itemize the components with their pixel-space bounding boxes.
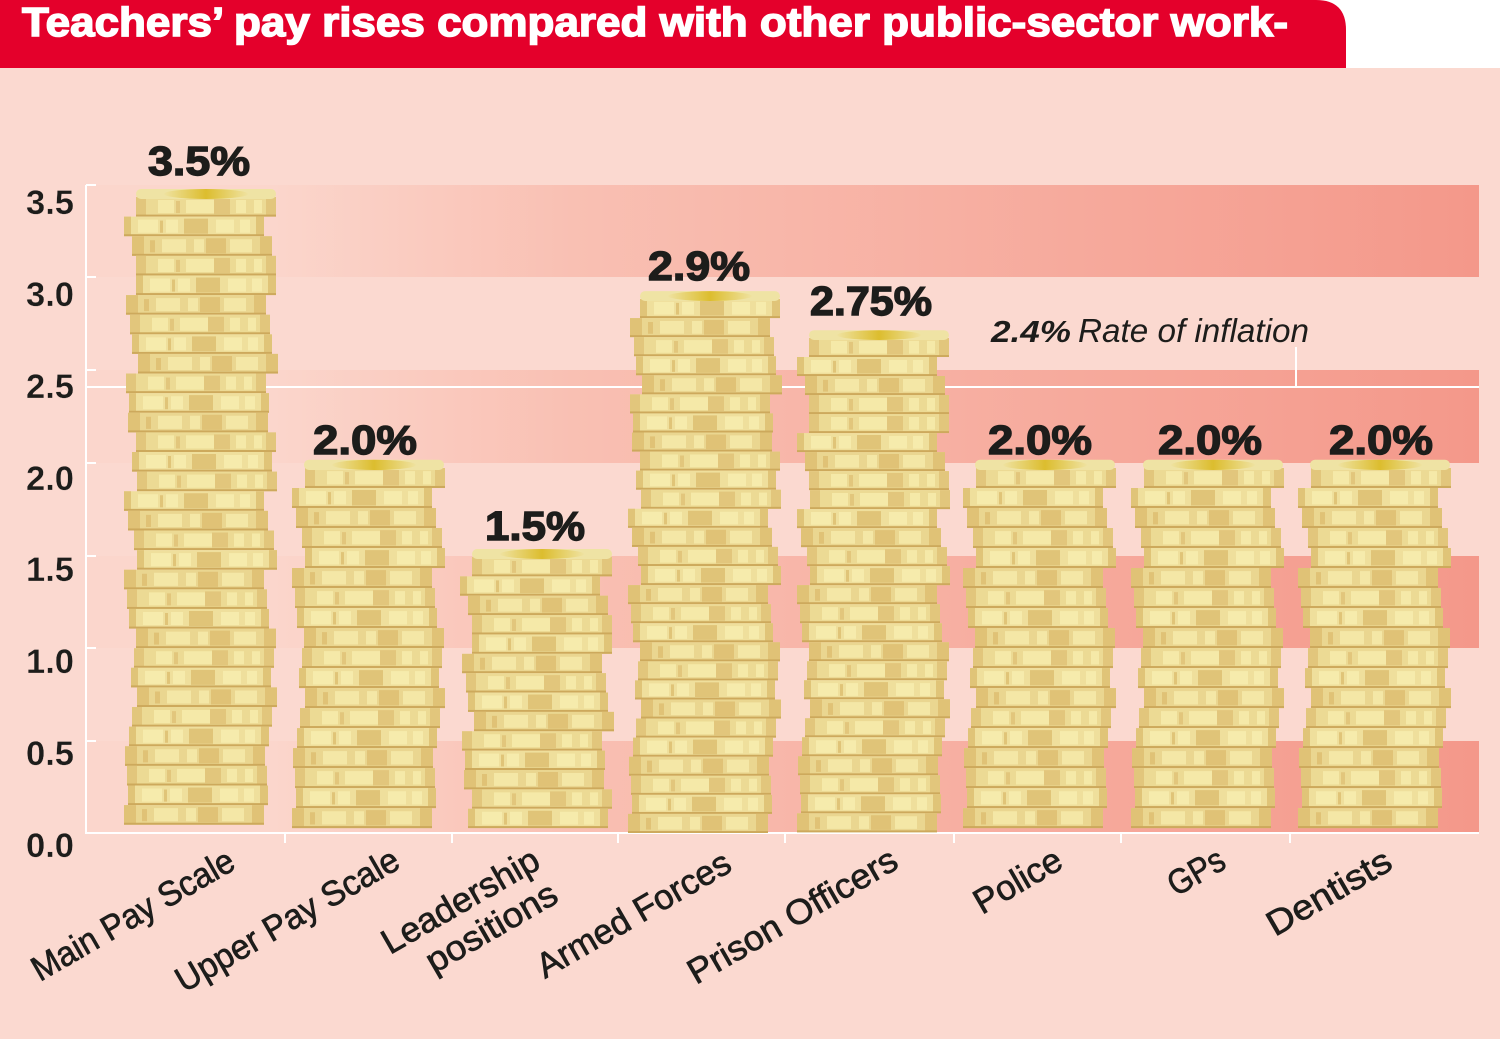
y axis labels: 1.0: [26, 643, 74, 681]
x axis labels: Prison Officers: [680, 840, 904, 992]
coin stack: Dentists: [1298, 460, 1451, 828]
coin stack: Prison Officers: [797, 330, 950, 832]
value labels: 2.0%: [1329, 417, 1433, 463]
x axis labels: Leadership: [374, 840, 546, 962]
x axis labels: [24, 840, 1399, 1000]
title: Teachers’ pay rises compared with other public-sector work-: [22, 0, 1288, 45]
value labels: 2.75%: [810, 278, 932, 324]
header bar: [0, 0, 1346, 68]
value labels: 2.9%: [648, 243, 750, 289]
coin stack: GPs: [1131, 460, 1284, 828]
value labels: 2.0%: [988, 417, 1092, 463]
x axis labels: Main Pay Scale: [24, 841, 241, 989]
y axis labels: 3.0: [26, 276, 74, 314]
coin stack: Upper Pay Scale: [292, 460, 445, 828]
axes: [86, 185, 1479, 843]
value labels: 3.5%: [148, 138, 250, 184]
y axis labels: 1.5: [26, 551, 74, 589]
coin stack: Armed Forces: [628, 291, 782, 833]
y axis labels: 2.0: [26, 460, 74, 498]
chart bands: [86, 185, 1479, 832]
x axis labels: Police: [966, 840, 1069, 922]
value labels: [148, 138, 1433, 549]
coin stack: Leadership positions: [460, 549, 614, 828]
coin stack: Police: [963, 460, 1116, 828]
x axis labels: positions: [418, 874, 564, 981]
y axis labels: 3.5: [26, 184, 74, 222]
inflation callout: Rate of inflation: [1078, 312, 1309, 349]
inflation line: [86, 347, 1479, 387]
inflation callout: 2.4%: [990, 314, 1071, 349]
value labels: 2.0%: [313, 417, 417, 463]
value labels: 1.5%: [485, 503, 585, 549]
x axis labels: Armed Forces: [530, 843, 738, 986]
y axis labels: 0.0: [26, 827, 74, 865]
x axis labels: Dentists: [1260, 841, 1399, 944]
x axis labels: Upper Pay Scale: [168, 840, 406, 1000]
y axis labels: [26, 184, 74, 865]
value labels: 2.0%: [1158, 417, 1262, 463]
x axis labels: GPs: [1160, 840, 1232, 904]
y axis labels: 0.5: [26, 735, 74, 773]
coin stack: Main Pay Scale: [124, 189, 278, 825]
y axis labels: 2.5: [26, 368, 74, 406]
